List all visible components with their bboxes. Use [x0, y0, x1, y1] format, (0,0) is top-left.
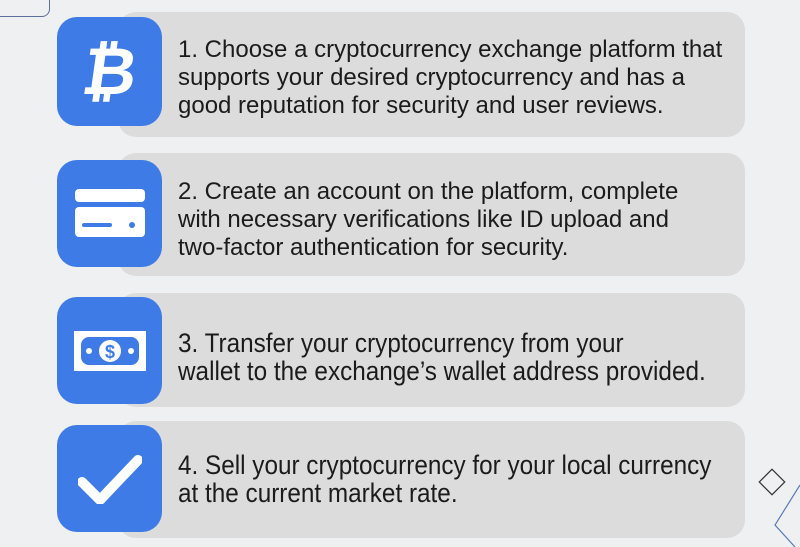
icon: check	[57, 425, 162, 532]
text 4	[178, 450, 712, 508]
card 3	[118, 293, 745, 407]
text 3	[178, 328, 706, 386]
icon: bitcoin	[57, 17, 162, 126]
icon: card	[57, 160, 162, 267]
decoration: corner box	[0, 0, 50, 17]
icon: money	[57, 297, 162, 404]
text 3: wallet to the exchange’s wallet address provided.	[178, 356, 706, 386]
text 4: at the current market rate.	[178, 478, 458, 508]
text 1	[178, 36, 722, 119]
decoration: diamond	[758, 468, 800, 547]
card 4	[118, 421, 745, 538]
card 1	[118, 12, 745, 137]
text 3: 3. Transfer your cryptocurrency from your	[178, 328, 624, 358]
card 2	[118, 153, 745, 276]
text 2: with necessary verifications like ID upload and	[178, 206, 669, 233]
text 4: 4. Sell your cryptocurrency for your local currency	[178, 450, 711, 480]
text 2	[178, 178, 678, 261]
text 1: supports your desired cryptocurrency and has a	[178, 64, 685, 91]
text 1: good reputation for security and user reviews.	[178, 92, 664, 119]
icon: money: $	[104, 342, 115, 362]
icon: bitcoin: ₿	[77, 33, 142, 110]
text 2: 2. Create an account on the platform, complete	[178, 178, 678, 205]
text 1: 1. Choose a cryptocurrency exchange platform that	[178, 36, 722, 63]
text 2: two-factor authentication for security.	[178, 234, 568, 261]
